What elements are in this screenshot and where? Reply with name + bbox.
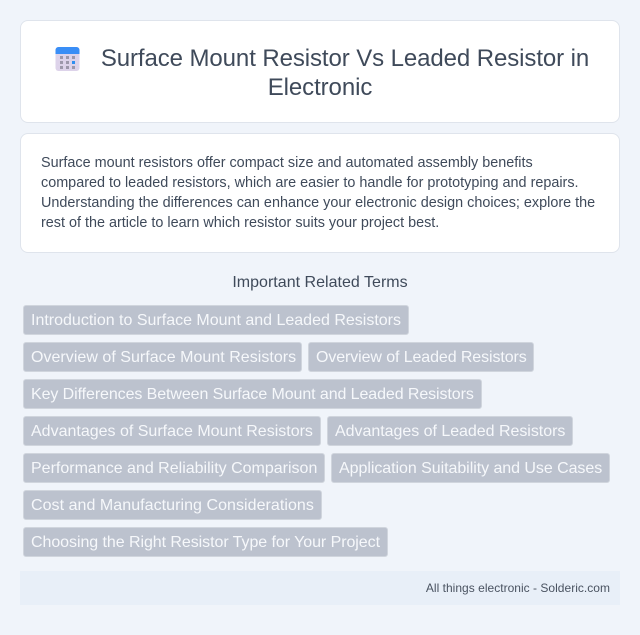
tag: [331, 453, 610, 483]
tag: [308, 342, 534, 372]
panel: intro text: [20, 133, 620, 253]
tag: Performance and Reliability Comparison: [31, 460, 317, 477]
title: Surface Mount Resistor Vs Leaded Resistor in: [101, 45, 589, 72]
intro paragraph: Surface mount resistors offer compact size and automated assembly benefits: [41, 155, 533, 171]
tag: [23, 342, 302, 372]
tag: Choosing the Right Resistor Type for Your Project: [31, 534, 380, 551]
intro paragraph: compared to leaded resistors, which are easier to handle for prototyping and repairs.: [41, 175, 579, 191]
tag: [327, 416, 573, 446]
tag: [23, 453, 325, 483]
title: [101, 45, 589, 101]
tag: Application Suitability and Use Cases: [339, 460, 602, 477]
tag: [23, 416, 321, 446]
footer bar: [20, 571, 620, 605]
heading: important related terms: Important Related Terms: [232, 274, 408, 291]
tag: [23, 305, 409, 335]
tag: [23, 490, 322, 520]
tag list: [23, 305, 610, 557]
footer credit: All things electronic - Solderic.com: [426, 581, 610, 595]
tag: Introduction to Surface Mount and Leaded Resistors: [31, 312, 401, 329]
tag: [23, 527, 388, 557]
tag: Advantages of Surface Mount Resistors: [31, 423, 313, 440]
intro paragraph: [41, 155, 595, 231]
intro paragraph: rest of the article to learn which resistor suits your project best.: [41, 215, 439, 231]
tag: Overview of Surface Mount Resistors: [31, 349, 296, 366]
tag: [23, 379, 482, 409]
tag: Key Differences Between Surface Mount and Leaded Resistors: [31, 386, 474, 403]
intro paragraph: Understanding the differences can enhance your electronic design choices; explore the: [41, 195, 595, 211]
tag: Advantages of Leaded Resistors: [335, 423, 565, 440]
title: Electronic: [268, 74, 372, 101]
tag: Cost and Manufacturing Considerations: [31, 497, 314, 514]
icon: calendar grid: [56, 47, 80, 71]
panel: title card: [20, 20, 620, 123]
tag: Overview of Leaded Resistors: [316, 349, 527, 366]
